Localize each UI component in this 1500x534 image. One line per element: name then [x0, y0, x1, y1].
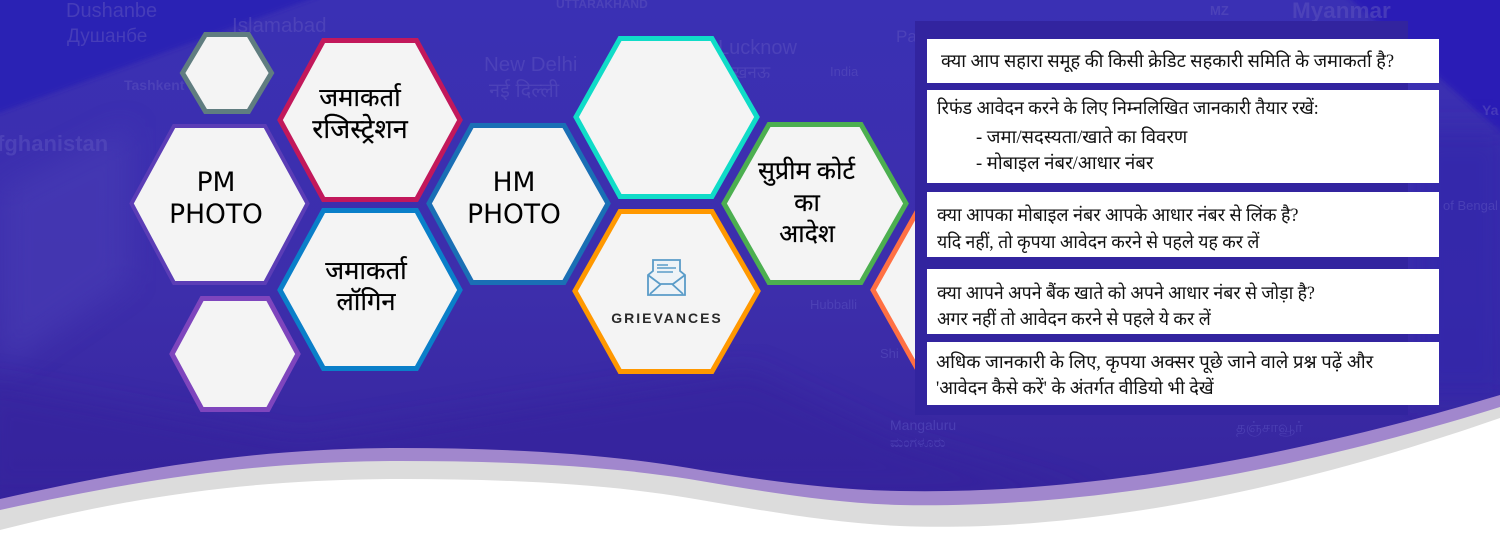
- hexagon: jamakarta login: जमाकर्ता: [325, 256, 408, 285]
- info box: depositor question: [927, 39, 1439, 83]
- hexagon: supreme court order: सुप्रीम कोर्ट: [758, 156, 856, 186]
- wave: grey band: [0, 407, 1500, 534]
- map labels: Dushanbe: [66, 0, 157, 22]
- map labels: Душанбе: [67, 26, 147, 47]
- map labels: लखनऊ: [722, 63, 771, 82]
- info box: bank account link: क्या आपने अपने बैंक खाते को अपने आधार नंबर से जोड़ा है?: [937, 284, 1315, 304]
- info box: bank account link: अगर नहीं तो आवेदन करने से पहले ये कर लें: [937, 310, 1211, 330]
- map labels: of Bengal: [1443, 198, 1498, 213]
- hexagon: grey small: [182, 34, 272, 112]
- info box: required documents: - मोबाइल नंबर/आधार नंबर: [976, 154, 1153, 174]
- info box: more information: 'आवेदन कैसे करें' के अंतर्गत वीडियो भी देखें: [936, 379, 1214, 399]
- hexagon: jamakarta registration: रजिस्ट्रेशन: [312, 113, 409, 144]
- map labels: ಮಂಗಳೂರು: [890, 434, 945, 450]
- map labels: Tashkent: [124, 77, 185, 93]
- panel: information backing: [915, 21, 1408, 415]
- map labels: New Delhi: [484, 53, 577, 76]
- hexagon: HM photo: PHOTO: [467, 199, 561, 230]
- map labels: Hubballi: [810, 297, 857, 312]
- map labels: தஞ்சாவூர்: [1236, 419, 1303, 436]
- hexagon: HM photo: HM: [493, 167, 535, 198]
- hexagon: supreme court order: [724, 124, 906, 282]
- map labels: India: [830, 64, 859, 79]
- hexagon: jamakarta registration: जमाकर्ता: [319, 83, 402, 112]
- hexagon: supreme court order: का: [794, 190, 820, 217]
- map labels: MZ: [1210, 3, 1229, 18]
- icon: open envelope: [648, 260, 685, 295]
- hexagon: jamakarta login: [280, 210, 460, 368]
- hexagon: partial orange behind panel: [873, 210, 960, 370]
- hexagon: PM photo: PM: [197, 167, 235, 198]
- map labels: Islamabad: [232, 14, 327, 37]
- wave: white base: [0, 418, 1500, 534]
- info box: mobile aadhaar link: यदि नहीं, तो कृपया आवेदन करने से पहले यह कर लें: [937, 233, 1259, 253]
- map labels: Shi: [880, 346, 899, 361]
- map labels: Lucknow: [718, 37, 797, 59]
- info box: more information: अधिक जानकारी के लिए, कृपया अक्सर पूछे जाने वाले प्रश्न पढ़ें और: [936, 353, 1373, 373]
- hexagon: jamakarta login: लॉगिन: [336, 287, 396, 316]
- map labels: Ya: [1482, 102, 1499, 118]
- info box: depositor question: क्या आप सहारा समूह की किसी क्रेडिट सहकारी समिति के जमाकर्ता है?: [941, 52, 1394, 72]
- info box: required documents: - जमा/सदस्यता/खाते का विवरण: [976, 128, 1187, 148]
- hexagon: HM photo: [429, 126, 608, 282]
- map labels: Pa: [896, 27, 917, 46]
- hexagon: purple small: [172, 298, 298, 410]
- map labels: नई दिल्ली: [489, 79, 560, 102]
- hexagon: jamakarta registration: [280, 40, 460, 200]
- info box: bank account link: [927, 269, 1439, 334]
- map labels: Mangaluru: [890, 417, 956, 433]
- wave: lilac band: [0, 395, 1500, 534]
- hexagon: PM photo: PHOTO: [169, 199, 263, 230]
- map labels: fghanistan: [0, 131, 108, 156]
- info box: mobile aadhaar link: क्या आपका मोबाइल नंबर आपके आधार नंबर से लिंक है?: [937, 206, 1299, 226]
- info box: mobile aadhaar link: [927, 192, 1439, 257]
- label: grievances: GRIEVANCES: [611, 310, 723, 326]
- hexagon: supreme court order: आदेश: [779, 219, 836, 248]
- hexagon: grievances: [575, 212, 758, 372]
- info box: more information: [927, 342, 1439, 405]
- hexagon: PM photo: [132, 126, 308, 283]
- hexagon: teal: [576, 38, 757, 196]
- info box: required documents: रिफंड आवेदन करने के लिए निम्नलिखित जानकारी तैयार रखें:: [937, 99, 1319, 119]
- info box: required documents: [927, 90, 1439, 183]
